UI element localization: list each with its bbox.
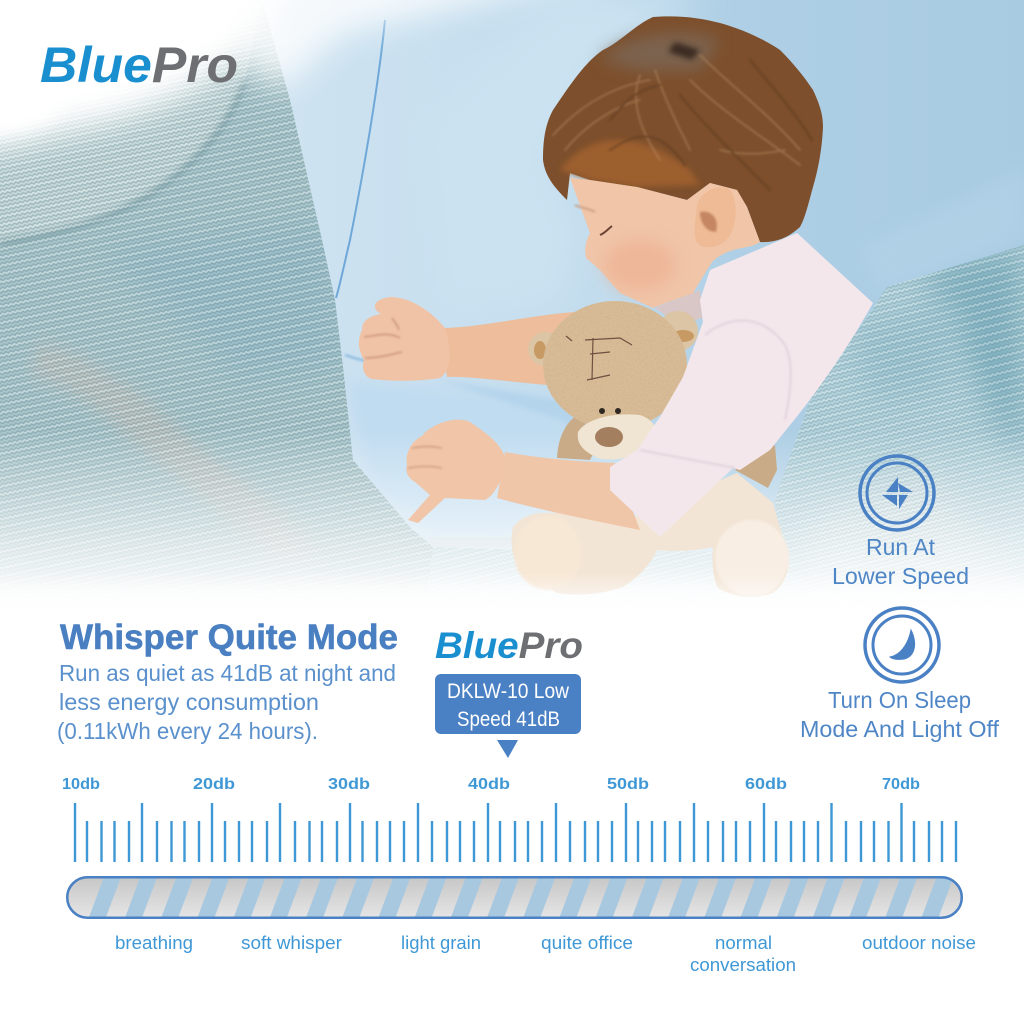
arrow: pointer to 41dB: [497, 740, 518, 758]
decibel scale labels: 40db: [468, 776, 510, 793]
knit blanket left: [0, 20, 433, 586]
text block: description: [57, 660, 396, 744]
noise examples labels: soft whisper: [241, 933, 342, 953]
icon: fan low speed: [860, 456, 934, 530]
label: run at lower speed: [832, 534, 969, 589]
hair: [543, 16, 823, 242]
noise examples labels: quite office: [541, 933, 633, 953]
decibel scale labels: 50db: [607, 776, 649, 793]
ear: [695, 187, 736, 247]
decibel scale labels: 30db: [328, 776, 370, 793]
lower arm and hand: [497, 452, 640, 530]
decibel scale labels: 60db: [745, 776, 787, 793]
knit blanket right and lower: [430, 245, 1024, 584]
noise examples labels: [115, 933, 976, 975]
decibel scale labels: 20db: [193, 776, 235, 793]
bear body and legs: [512, 473, 788, 597]
label: turn on sleep mode and light off: [800, 687, 1000, 742]
top left white fade: [0, 0, 300, 150]
noise examples labels: normal: [715, 933, 772, 953]
icon: sleep moon: [865, 608, 939, 682]
heading: Whisper Quite Mode: Whisper Quite Mode: [60, 618, 398, 657]
decibel scale labels: [62, 776, 920, 793]
bear head: [543, 301, 687, 429]
label: run at lower speed: Lower Speed: [832, 563, 969, 589]
noise examples labels: conversation: [690, 955, 796, 975]
decibel scale labels: 10db: [62, 776, 100, 793]
face: [570, 178, 760, 308]
lower fade across blankets: [0, 430, 1024, 620]
bear ears: [528, 332, 562, 366]
noise examples labels: outdoor noise: [862, 933, 976, 953]
text block: description: (0.11kWh every 24 hours).: [57, 718, 318, 744]
shirt: [610, 233, 873, 537]
photo: sleeping child with teddy bear under knit blanket: [0, 0, 1024, 645]
text block: description: less energy consumption: [59, 689, 319, 715]
logo: BluePro middle: BluePro: [435, 625, 583, 666]
bear snout: [578, 414, 657, 459]
ruler ticks: [75, 803, 956, 862]
striped noise level bar: [66, 876, 963, 919]
noise examples labels: light grain: [401, 933, 481, 953]
pillow and sheet: [260, 0, 1024, 560]
neck shadow: [655, 290, 702, 325]
label: turn on sleep mode and light off: Mode And Light Off: [800, 716, 1000, 742]
decibel scale labels: 70db: [882, 776, 920, 793]
final fade over feet: [0, 572, 1024, 616]
callout: DKLW-10 low speed: DKLW-10 Low: [447, 680, 570, 703]
logo: BluePro top: BluePro: [40, 37, 238, 93]
text block: description: Run as quiet as 41dB at night and: [59, 660, 396, 686]
callout: DKLW-10 low speed: [435, 674, 581, 734]
label: run at lower speed: Run At: [866, 534, 936, 560]
blanket fold: [0, 53, 249, 243]
upper arm and hand: [440, 312, 600, 385]
callout: DKLW-10 low speed: Speed 41dB: [457, 708, 560, 731]
label: turn on sleep mode and light off: Turn On Sleep: [828, 687, 971, 713]
noise examples labels: breathing: [115, 933, 193, 953]
